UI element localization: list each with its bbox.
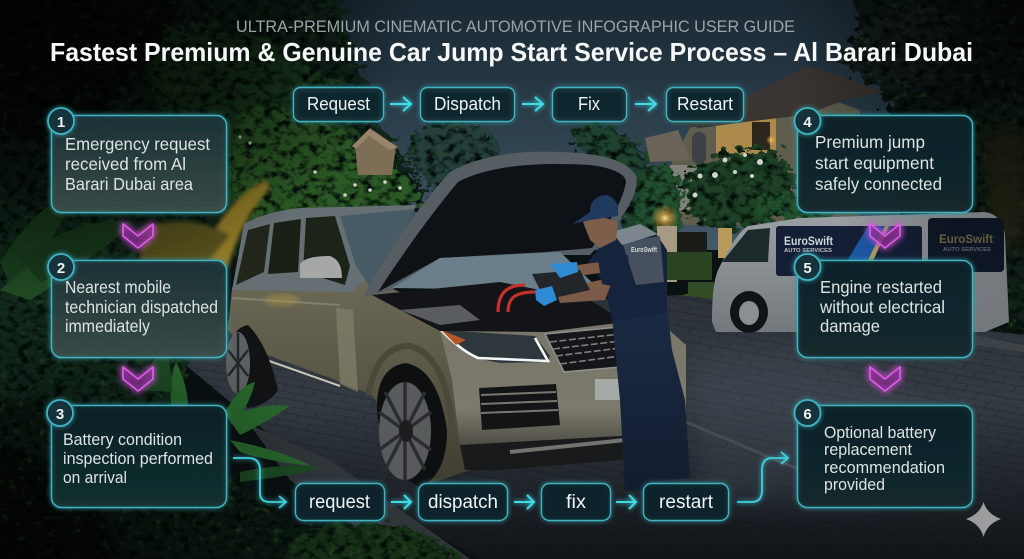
step 4 text: Premium jump [815,132,925,152]
pill: fix [542,484,610,520]
delivery van [712,212,1009,333]
connector from bottom flow to step 6 [737,452,788,502]
step 3 text: Battery condition [63,430,182,449]
edge darkening top right [780,0,1024,340]
number plate [595,379,621,400]
arrow [391,495,411,509]
door mirror [300,256,342,278]
step 1 number badge: 1 [57,114,65,131]
tree canopy right [850,0,1024,350]
warm-lit shrub far right [985,128,1024,252]
title: Fastest Premium & Genuine Car Jump Start Service Process – Al Barari Dubai [50,37,973,67]
step 1 number badge [48,108,74,134]
step 3 number badge: 3 [56,406,64,423]
large leaves upper left [0,195,132,300]
subtitle: ULTRA-PREMIUM CINEMATIC AUTOMOTIVE INFOGRAPHIC USER GUIDE [236,18,795,36]
arrow [522,97,543,111]
step 2 number badge: 2 [57,260,65,277]
pill: fix: fix [566,492,587,513]
villa gardens [630,149,830,245]
technician [532,195,690,492]
step 4 number badge: 4 [803,114,812,131]
van logo: EuroSwift [939,232,993,246]
pill: restart [644,484,728,520]
pill: Request [294,88,384,122]
top process flow [294,88,744,122]
distant palms [405,6,953,240]
step 5 text: damage [820,316,880,336]
step 1 text [65,134,210,194]
engine bay [372,282,625,332]
bottom process flow [296,484,728,520]
sky [300,0,900,250]
arrow [390,97,411,111]
van logo: AUTO SERVICES [943,247,991,253]
car side body [228,268,470,484]
van logo: EuroSwift [784,234,833,248]
head and cap [583,216,618,248]
step 3 text: inspection performed [63,449,213,468]
arrow [514,495,534,509]
torso [588,232,667,322]
step 1 text: Emergency request [65,134,210,154]
step 3 text: on arrival [63,468,127,487]
open hood [362,152,637,298]
step 2 panel [48,254,226,358]
step 6 text: replacement [824,441,912,459]
step 4 text: safely connected [815,174,942,194]
car roof and windows [232,205,416,292]
pill: request [296,484,384,520]
pill: request: request [309,492,371,513]
step 5 text [819,277,945,336]
chevron 4 to 5 [870,224,900,248]
pill: dispatch [418,484,508,520]
step 1 text: received from Al [65,154,186,174]
door panel highlights [336,308,358,392]
van logo [784,232,993,254]
step 6 panel [794,400,972,508]
step 5 text: Engine restarted [820,277,942,297]
sparkle watermark [966,502,1001,537]
technician badge: EuroSwift [631,247,658,254]
step 2 text: technician dispatched [65,297,218,317]
step 4 text: start equipment [815,153,934,173]
tree canopy left [0,0,428,285]
step 2 number badge [48,254,74,280]
trousers [612,306,690,492]
edge darkening top left [0,0,420,300]
headlight [441,330,550,363]
step 5 number badge: 5 [803,260,812,277]
edge darkening bottom left [0,300,360,559]
connector from step 3 to bottom flow [233,458,286,508]
green leaves behind step 3 [140,345,322,482]
flowers [238,135,763,198]
car front [440,322,686,447]
front wheel [368,346,452,487]
step 6 text: provided [824,476,885,494]
step 5 number badge [794,254,820,280]
arrow [616,495,636,509]
step 6 number badge [794,400,820,426]
grille [545,327,620,372]
main villa [645,66,885,225]
step 6 text: recommendation [824,459,945,477]
step 4 text [815,132,942,194]
rear wheel [226,325,278,408]
pill: Restart [666,88,744,122]
lower intake [479,384,560,430]
step 2 text: immediately [65,316,150,336]
paved driveway [170,295,1024,559]
step 6 number badge: 6 [803,406,812,423]
pill: restart: restart [659,492,714,513]
car [226,152,686,487]
pill: dispatch: dispatch [428,492,498,513]
step 2 text [65,277,218,336]
step 4 panel [794,108,972,212]
step 1 text: Barari Dubai area [65,174,193,194]
step 5 text: without electrical [819,297,945,317]
pill: Dispatch: Dispatch [434,93,501,114]
step 4 number badge [794,108,820,134]
handheld jump starter [532,270,590,300]
step 6 text [824,424,945,494]
step 3 number badge [47,400,73,426]
pill: Restart: Restart [677,93,733,114]
step 3 text [63,430,213,487]
chevron 5 to 6 [870,367,900,391]
pill: Fix [552,88,626,122]
step 2 text: Nearest mobile [65,277,171,297]
step 1 panel [48,108,226,212]
blue gloves [535,286,557,306]
van logo: AUTO SERVICES [784,248,832,254]
step 3 panel [47,400,226,508]
pill: Dispatch [420,88,514,122]
arrow [635,97,656,111]
pill: Request: Request [307,93,370,114]
pill: Fix: Fix [578,93,601,114]
step 5 panel [794,254,972,358]
step 6 text: Optional battery [824,424,937,442]
arm [555,280,612,303]
warm lit branches [140,180,270,268]
garden lamp and gate [651,204,732,308]
small house [352,128,398,175]
chevron 1 to 2 [123,224,153,248]
foreground plants [0,200,470,559]
chevron 2 to 3 [123,367,153,391]
